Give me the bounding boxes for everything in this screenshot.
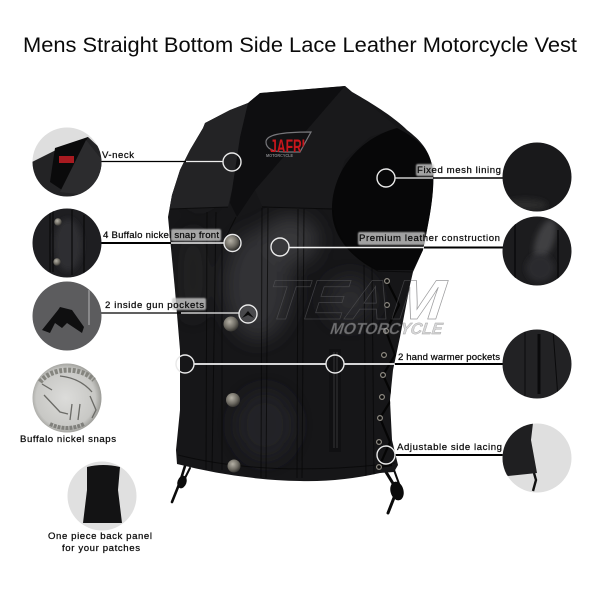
label: buffalo nickel snaps: Buffalo nickel snaps xyxy=(20,434,116,445)
right lapel xyxy=(345,86,362,98)
label highlights xyxy=(171,164,434,310)
thumbnail: side lacing xyxy=(500,423,572,493)
buffalo nickel snaps xyxy=(224,236,240,472)
eyelets xyxy=(377,279,389,469)
leather shading xyxy=(183,136,374,460)
label: back panel: for your patches xyxy=(62,543,140,554)
label: side lacing: Adjustable side lacing xyxy=(397,442,502,453)
watermark: MOTORCYCLE xyxy=(328,320,445,338)
thumbnail: buffalo nickel xyxy=(32,364,102,432)
thumbnail: mesh lining xyxy=(502,142,572,212)
connector: hand warmer pockets xyxy=(176,355,503,373)
side lacing xyxy=(379,281,399,467)
thumbnail: v-neck xyxy=(32,127,102,197)
thumbnail: back panel xyxy=(67,461,137,531)
label: hand warmer pockets: 2 hand warmer pockets xyxy=(398,352,500,363)
vest photo illustration xyxy=(160,80,440,513)
label: back panel: One piece back panel xyxy=(48,531,152,542)
connector: V-neck xyxy=(101,153,241,171)
watermark: TEAM xyxy=(258,269,456,332)
label: V-neck: V-neck xyxy=(102,150,134,161)
vest body xyxy=(160,80,440,490)
logo: MOTORCYCLE xyxy=(266,153,293,158)
thumbnail: gun pocket xyxy=(32,281,102,351)
neck interior xyxy=(230,86,345,217)
thumbnail: leather xyxy=(502,216,572,286)
label: gun pockets: 2 inside gun pockets xyxy=(105,300,204,311)
label: snap front: 4 Buffalo nickel snap front xyxy=(103,230,219,241)
lace tassel right xyxy=(386,470,405,513)
connector: snap front xyxy=(101,234,241,252)
label: premium leather: Premium leather construction xyxy=(359,233,500,244)
mesh armhole xyxy=(332,128,433,270)
connector: gun pockets xyxy=(101,305,257,323)
lace tassel left xyxy=(172,466,190,502)
logo xyxy=(266,132,314,158)
hand warmer pocket zip xyxy=(334,352,338,448)
connector: mesh lining xyxy=(377,169,503,187)
gun pocket chevron xyxy=(240,306,256,322)
left lapel xyxy=(168,103,248,209)
thumbnail: hand warmer pocket xyxy=(502,329,572,399)
thumbnail: snaps xyxy=(32,208,102,278)
title: Mens Straight Bottom Side Lace Leather Motorcycle Vest xyxy=(23,33,577,57)
stitching xyxy=(170,207,412,478)
label: mesh lining: Fixed mesh lining xyxy=(417,165,501,176)
logo: JAFRUI xyxy=(270,137,314,158)
connector: premium leather xyxy=(271,238,503,256)
label: back panel xyxy=(48,531,152,554)
connector: side lacing xyxy=(377,446,503,464)
